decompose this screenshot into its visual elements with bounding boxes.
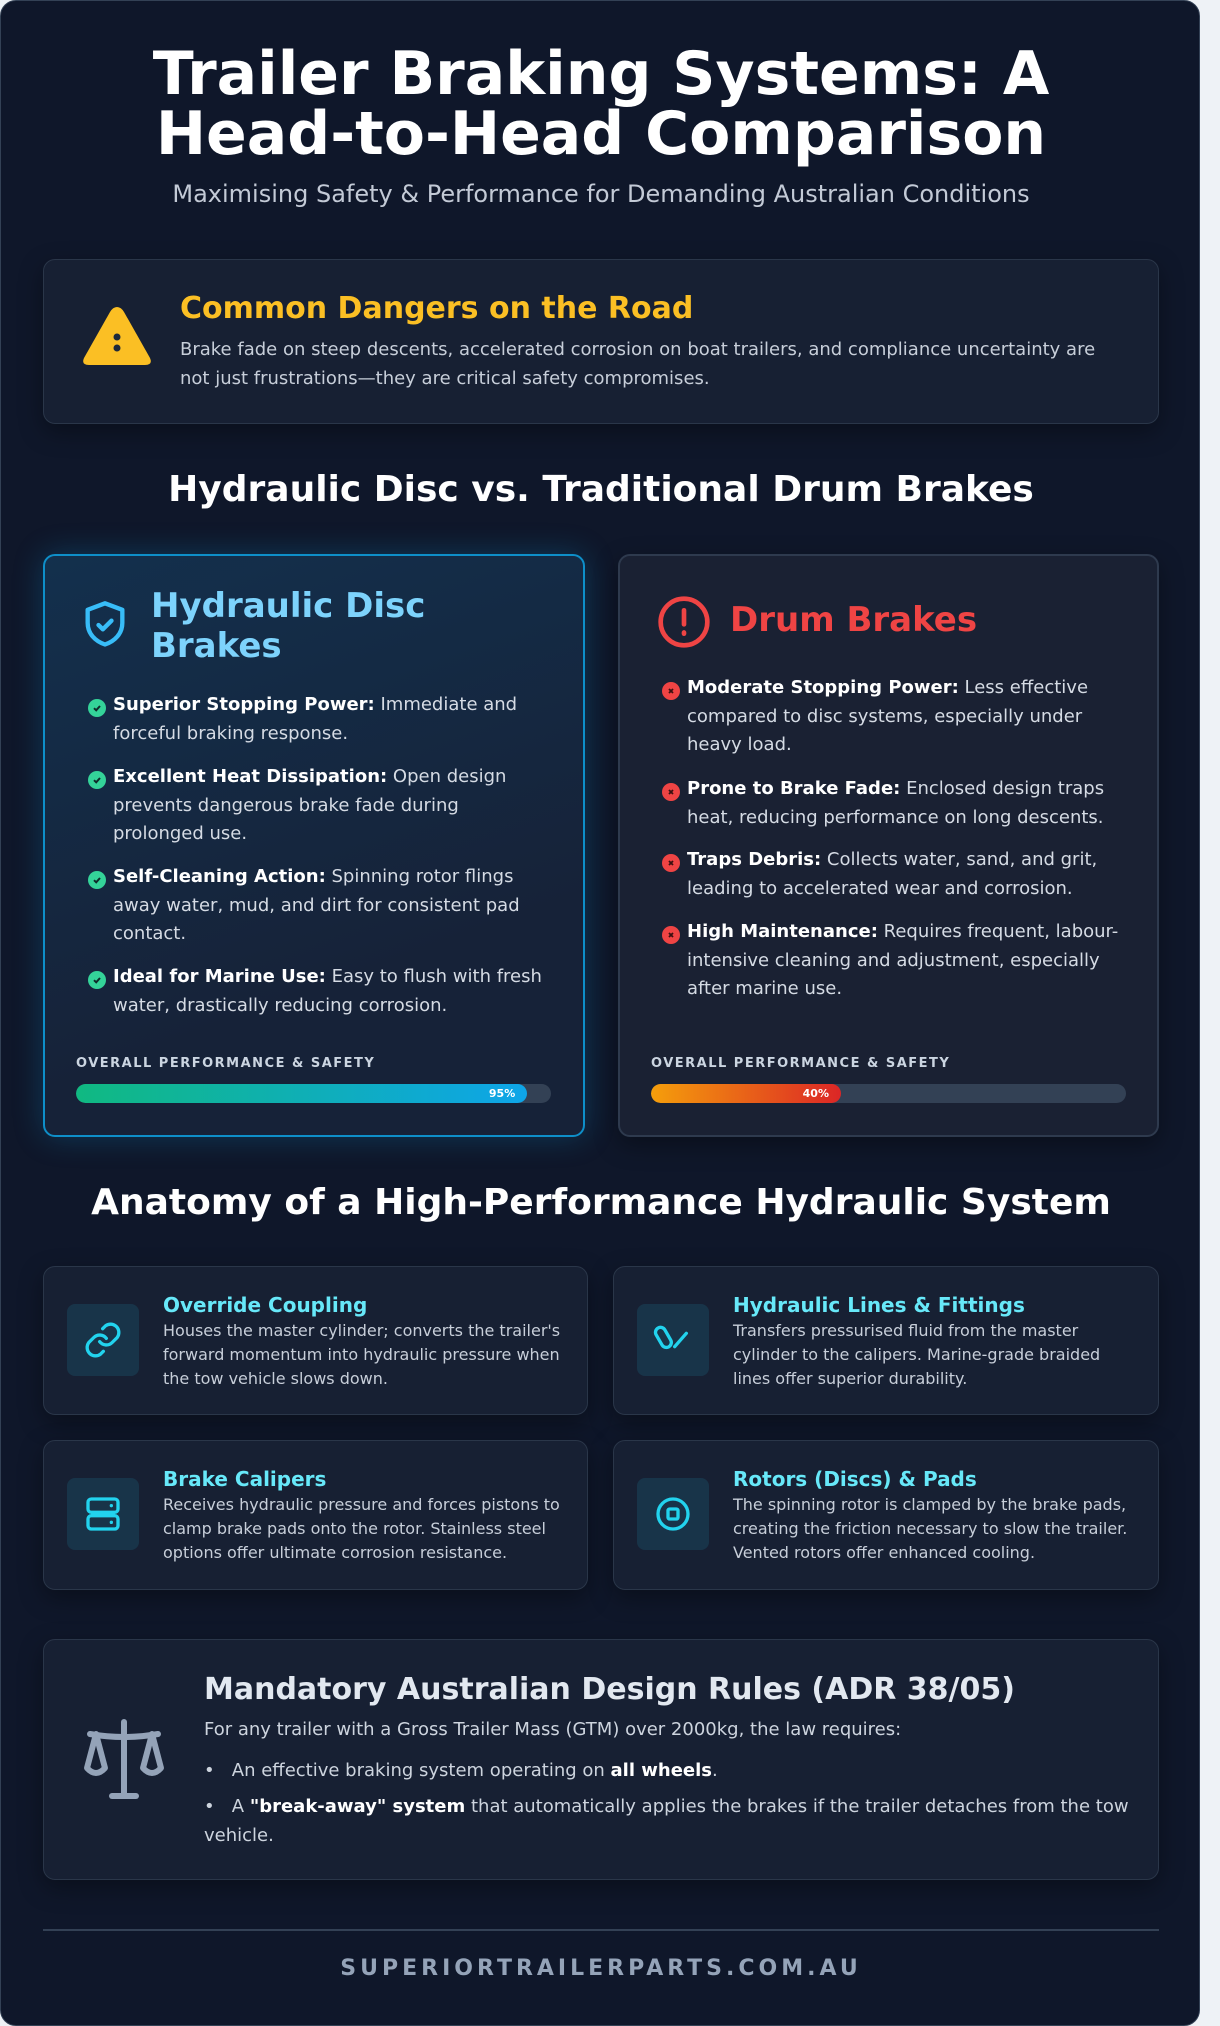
list: disc pros: Self-Cleaning Action: Spinning rotor flings away water, mud, and dirt for consistent pad contact. [113, 866, 520, 944]
text: ADR requirements: • An effective braking system operating on all wheels. [204, 1760, 718, 1780]
title [153, 39, 1049, 169]
panel: ADR rules [43, 1639, 1159, 1880]
panel: drum brakes [618, 554, 1159, 1137]
icon: warning triangle [83, 307, 151, 365]
list: disc pros: Ideal for Marine Use: Easy to flush with fresh water, drastically reducing corrosion. [113, 966, 542, 1016]
list: drum cons: Traps Debris: Collects water, sand, and grit, leading to accelerated wear and corrosion. [687, 849, 1097, 898]
text: override coupling: Houses the master cylinder; converts the trailer's forward momentum into hydraulic pressure when the tow vehicle slows down. [163, 1321, 560, 1388]
subtitle: Maximising Safety & Performance for Demanding Australian Conditions [172, 180, 1030, 208]
text: override coupling: Override Coupling [163, 1293, 367, 1317]
panel: hydraulic disc [43, 554, 585, 1137]
icon: rotor [637, 1478, 709, 1550]
title: Head-to-Head Comparison [156, 99, 1046, 169]
icon: lines [637, 1304, 709, 1376]
list: disc pros [88, 694, 542, 1016]
list: drum cons: Moderate Stopping Power: Less effective compared to disc systems, especially under heavy load. [687, 677, 1088, 755]
text: brake calipers: Brake Calipers [163, 1467, 326, 1491]
icon: alert circle [658, 596, 710, 648]
text: rotors: The spinning rotor is clamped by the brake pads, creating the friction necessary to slow the trailer. Vented rotors offer enhanced cooling. [733, 1495, 1127, 1562]
title: Trailer Braking Systems: A [153, 39, 1049, 109]
list: drum cons: High Maintenance: Requires frequent, labour-intensive cleaning and adjustment, especially after marine use. [687, 921, 1118, 999]
list: drum cons [662, 677, 1118, 999]
panel: override coupling [43, 1266, 588, 1415]
icon: link [67, 1304, 139, 1376]
text: dangers: Brake fade on steep descents, accelerated corrosion on boat trailers, and compliance uncertainty are not just frustrations—they are critical safety compromises. [180, 339, 1095, 388]
icon: scales [84, 1719, 164, 1799]
list: disc pros: Superior Stopping Power: Immediate and forceful braking response. [113, 694, 517, 744]
bar chart: drum 40%: 40% [803, 1087, 829, 1100]
icon: calipers [67, 1478, 139, 1550]
bar chart: disc 95%: 95% [489, 1087, 515, 1100]
text: hydraulic lines: Transfers pressurised fluid from the master cylinder to the calipers. Marine-grade braided lines offer superior durability. [733, 1321, 1100, 1388]
heading: comparison: Hydraulic Disc vs. Traditional Drum Brakes [168, 469, 1034, 510]
panel: common dangers [43, 259, 1159, 424]
heading: dangers: Common Dangers on the Road [180, 291, 693, 326]
footer: SUPERIORTRAILERPARTS.COM.AU [340, 1956, 862, 1981]
list: disc pros: Excellent Heat Dissipation: Open design prevents dangerous brake fade during prolonged use. [113, 766, 506, 844]
panel: hydraulic lines [613, 1266, 1159, 1415]
panel: rotors [613, 1440, 1159, 1590]
label: drum performance: OVERALL PERFORMANCE & SAFETY [651, 1056, 950, 1071]
heading: disc [151, 586, 425, 666]
heading: disc: Hydraulic Disc [151, 586, 425, 626]
text: brake calipers: Receives hydraulic pressure and forces pistons to clamp brake pads onto the rotor. Stainless steel options offer ultimate corrosion resistance. [163, 1495, 560, 1562]
text: ADR requirements: • A "break-away" system that automatically applies the brakes if the trailer detaches from the tow vehicle. [204, 1796, 1129, 1846]
icon: shield [86, 601, 124, 647]
heading: ADR: Mandatory Australian Design Rules (ADR 38/05) [204, 1672, 1015, 1707]
bar chart: disc 95% [76, 1084, 551, 1103]
heading: disc: Brakes [151, 626, 282, 666]
panel: brake calipers [43, 1440, 588, 1590]
bar chart: drum 40% [651, 1084, 1126, 1103]
heading: drum: Drum Brakes [730, 600, 977, 640]
text: hydraulic lines: Hydraulic Lines & Fittings [733, 1293, 1025, 1317]
text: rotors: Rotors (Discs) & Pads [733, 1467, 977, 1491]
heading: anatomy: Anatomy of a High-Performance Hydraulic System [91, 1182, 1111, 1223]
list: drum cons: Prone to Brake Fade: Enclosed design traps heat, reducing performance on long descents. [687, 778, 1104, 828]
text: ADR requirements: For any trailer with a Gross Trailer Mass (GTM) over 2000kg, the law requires: [204, 1719, 901, 1740]
text: ADR requirements [204, 1719, 1129, 1846]
label: disc performance: OVERALL PERFORMANCE & SAFETY [76, 1056, 375, 1071]
